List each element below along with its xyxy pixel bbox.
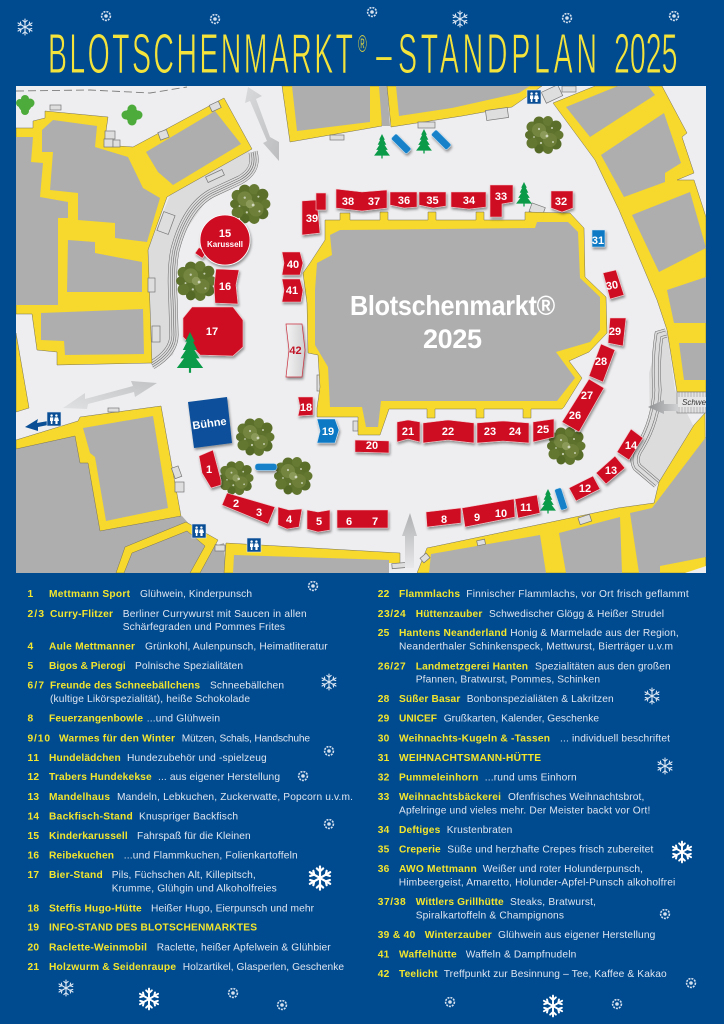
- stall 17: [183, 307, 243, 356]
- street name strip: [677, 392, 708, 413]
- arrows: [25, 87, 678, 568]
- stall 40: [282, 252, 303, 275]
- entry 15: [28, 831, 251, 842]
- title: BLOTSCHENMARKT: [48, 21, 353, 86]
- stalls 23 and 24: 23: [484, 426, 496, 438]
- entry 14: 14: [28, 812, 39, 823]
- entry 37/38: [378, 897, 596, 921]
- stall 8: 8: [441, 514, 447, 526]
- stage: Bühne: [192, 416, 227, 432]
- stall 11: 11: [520, 502, 532, 514]
- stall 20: 20: [366, 440, 378, 452]
- entry 32: ...rund ums Einhorn: [485, 772, 577, 783]
- stalls 37 and 38: [336, 189, 387, 211]
- stall 13: 13: [605, 465, 617, 477]
- entry 15: 15: [28, 831, 39, 842]
- stalls 2 and 3: 3: [256, 507, 262, 519]
- entry 32: [378, 772, 577, 783]
- entry 4: 4: [28, 641, 34, 652]
- entry 42: 42: [378, 969, 390, 980]
- stalls 9 and 10: [462, 499, 515, 527]
- entry 41: Waffelhütte: [399, 950, 457, 961]
- entry 8: [28, 714, 220, 725]
- title: ®: [358, 32, 367, 58]
- stall 31 info: [592, 230, 605, 247]
- stalls: [183, 185, 643, 532]
- entry 1: Mettmann Sport: [49, 589, 131, 600]
- stall 5: 5: [316, 516, 322, 528]
- entry 26/27: Landmetzgerei Hanten: [416, 661, 528, 672]
- entry 20: Raclette-Weinmobil: [49, 942, 147, 953]
- title: –: [376, 21, 392, 86]
- entry 26/27: [378, 661, 671, 685]
- entry 6/7: (kultige Likörspezialität), heiße Schokolade: [50, 694, 250, 705]
- stall 17: 17: [206, 326, 218, 338]
- buildings: bottom left block: [16, 406, 400, 573]
- stall 40: 40: [287, 259, 299, 271]
- entry 9/10: 9/10: [28, 733, 50, 744]
- entry 39 & 40: Glühwein aus eigener Herstellung: [498, 930, 656, 941]
- entry 14: Knuspriger Backfisch: [139, 812, 238, 823]
- entry 12: ... aus eigener Herstellung: [158, 772, 280, 783]
- stall 18: 18: [300, 402, 312, 414]
- entry 2/3: Berliner Currywurst mit Saucen in allen: [123, 609, 307, 620]
- entry 20: Raclette, heißer Apfelwein & Glühbier: [157, 942, 331, 953]
- entry 33: [378, 792, 650, 817]
- entry 18: 18: [28, 903, 39, 914]
- entry 39 & 40: 39 & 40: [378, 930, 416, 941]
- entry 21: Holzwurm & Seidenraupe: [49, 962, 176, 973]
- entry 28: Bonbonspezialiäten & Lakritzen: [467, 694, 614, 705]
- stall 28: [589, 344, 615, 382]
- entry 29: Grußkarten, Kalender, Geschenke: [444, 714, 599, 725]
- stall 39: [302, 193, 326, 235]
- entry 25: [378, 628, 679, 652]
- stall 34: [451, 192, 486, 209]
- stall 28: 28: [595, 356, 607, 368]
- entry 21: [28, 962, 344, 973]
- stall 11: [515, 495, 540, 518]
- stall 13: [596, 456, 625, 484]
- entry 25: Hantens Neanderland: [399, 628, 507, 639]
- entry 6/7: 6/7: [28, 681, 44, 692]
- entry 2/3: Schärfegraden und Pommes Frites: [123, 622, 285, 633]
- left road with steps: [148, 150, 257, 368]
- stall 36: 36: [398, 195, 410, 207]
- entry 25: Honig & Marmelade aus der Region,: [510, 628, 679, 639]
- entry 39 & 40: Winterzauber: [425, 930, 492, 941]
- entry 5: 5: [28, 661, 34, 672]
- entry 37/38: 37/38: [378, 897, 406, 908]
- entry 4: [28, 641, 328, 652]
- central building label: 2025: [423, 324, 482, 354]
- entry 2/3: Curry-Flitzer: [50, 609, 113, 620]
- entry 23/24: [378, 609, 664, 620]
- stalls 23 and 24: [477, 421, 529, 443]
- street name strip: Schwel: [682, 398, 708, 407]
- entry 23/24: Schwedischer Glögg & Heißer Strudel: [489, 609, 664, 620]
- entry 22: Flammlachs: [399, 589, 460, 600]
- entry 31: 31: [378, 753, 390, 764]
- stalls 26 and 27: 26: [569, 410, 581, 422]
- entry 41: 41: [378, 950, 390, 961]
- entry 11: [28, 753, 267, 764]
- entry 25: 25: [378, 628, 390, 639]
- entry 19: INFO-STAND DES BLOTSCHENMARKTES: [49, 923, 257, 934]
- entry 36: Himbeergeist, Amaretto, Holunder-Apfel-Punsch alkoholfrei: [399, 878, 675, 889]
- buildings: right block: [553, 86, 706, 392]
- stalls 2 and 3: 2: [233, 498, 239, 510]
- stall 14: [617, 429, 643, 460]
- entry 9/10: Warmes für den Winter: [59, 733, 175, 744]
- entry 30: Weihnachts-Kugeln & -Tassen: [399, 733, 550, 744]
- entry 18: Heißer Hugo, Eierpunsch und mehr: [151, 903, 315, 914]
- stall 32: 32: [555, 196, 567, 208]
- stall 14: 14: [625, 440, 638, 452]
- entry 32: 32: [378, 772, 390, 783]
- stall 32: [551, 191, 573, 212]
- entry 20: 20: [28, 942, 39, 953]
- entry 42: Teelicht: [399, 969, 438, 980]
- entry 4: Aule Mettmanner: [49, 641, 135, 652]
- stalls 6 and 7: 7: [372, 516, 378, 528]
- stall 18: [298, 397, 313, 416]
- stall 34: 34: [463, 195, 476, 207]
- entry 5: [28, 661, 243, 672]
- stall 1: 1: [206, 464, 212, 476]
- entry 11: Hundezubehör und -spielzeug: [127, 753, 267, 764]
- entry 31: WEIHNACHTSMANN-HÜTTE: [399, 751, 541, 764]
- entry 26/27: 26/27: [378, 661, 406, 672]
- entry 14: [28, 812, 238, 823]
- stalls 9 and 10: 10: [495, 508, 507, 520]
- entry 36: Weißer und roter Holunderpunsch,: [483, 864, 643, 875]
- entry 30: [378, 733, 670, 744]
- entry 8: Feuerzangenbowle: [49, 714, 143, 725]
- entry 26/27: Spezialitäten aus den großen: [535, 661, 671, 672]
- stalls 37 and 38: 38: [342, 196, 354, 208]
- stall 41: 41: [286, 285, 298, 297]
- entry 22: 22: [378, 589, 390, 600]
- entry 6/7: Schneebällchen: [210, 681, 284, 692]
- large christmas tree: [177, 332, 203, 373]
- entry 19: 19: [28, 923, 39, 934]
- entry 29: 29: [378, 714, 390, 725]
- entry 11: 11: [28, 753, 39, 764]
- entry 15: Fahrspaß für die Kleinen: [137, 831, 251, 842]
- stall 29: 29: [609, 326, 621, 338]
- entry 2/3: 2/3: [28, 609, 44, 620]
- map: [16, 85, 708, 573]
- stall 19 info: [317, 419, 339, 443]
- entry 18: Steffis Hugo-Hütte: [49, 903, 142, 914]
- entry 8: 8: [28, 714, 34, 725]
- stall 15 carousel: Karussell: [207, 240, 243, 249]
- stalls 26 and 27: [562, 379, 604, 432]
- entry 16: Reibekuchen: [49, 851, 114, 862]
- entry 9/10: Mützen, Schals, Handschuhe: [182, 733, 310, 744]
- entry 5: Polnische Spezialitäten: [135, 661, 243, 672]
- entry 33: 33: [378, 792, 390, 803]
- entry 17: [28, 870, 277, 895]
- entry 34: Krustenbraten: [447, 825, 512, 836]
- stalls 9 and 10: 9: [474, 512, 480, 524]
- entry 33: Ofenfrisches Weihnachtsbrot,: [508, 792, 644, 803]
- entry 16: [28, 851, 298, 862]
- stall 4: [278, 507, 302, 529]
- entry 16: ...und Flammkuchen, Folienkartoffeln: [124, 851, 298, 862]
- entry 28: 28: [378, 694, 390, 705]
- entry 13: Mandelhaus: [49, 792, 110, 803]
- entry 34: 34: [378, 825, 390, 836]
- entry 17: Pils, Füchschen Alt, Killepitsch,: [112, 870, 256, 881]
- entry 17: Bier-Stand: [49, 870, 103, 881]
- entry 36: 36: [378, 864, 390, 875]
- stall 30: 30: [605, 279, 619, 293]
- entry 25: Neanderthaler Schinkenspeck, Mettwurst, Bierträger u.v.m: [399, 641, 673, 652]
- entry 1: 1: [28, 589, 34, 600]
- stall 22: [423, 420, 474, 443]
- entry 30: 30: [378, 733, 390, 744]
- entry 9/10: [28, 733, 310, 744]
- entry 39 & 40: [378, 930, 656, 941]
- stall 36: [390, 192, 417, 208]
- entry 13: Mandeln, Lebkuchen, Zuckerwatte, Popcorn u.v.m.: [117, 792, 353, 803]
- stall 4: 4: [286, 514, 293, 526]
- blue benches: [255, 129, 568, 511]
- entry 42: Treffpunkt zur Besinnung – Tee, Kaffee & Kakao: [444, 969, 667, 980]
- central building label: [352, 295, 555, 348]
- stall 12: 12: [579, 483, 591, 495]
- entry 35: 35: [378, 844, 390, 855]
- entry 36: [378, 864, 675, 889]
- stalls 23 and 24: 24: [509, 426, 522, 438]
- stall 8: [426, 508, 461, 527]
- stalls 2 and 3: [222, 493, 275, 524]
- entry 34: Deftiges: [399, 825, 441, 836]
- trees: [16, 95, 586, 513]
- entry 16: 16: [28, 851, 39, 862]
- entry 33: Weihnachtsbäckerei: [399, 792, 501, 803]
- stall 41: [282, 279, 303, 302]
- entry 1: [28, 589, 252, 600]
- stall 25: [533, 419, 554, 442]
- entry 23/24: 23/24: [378, 609, 406, 620]
- entry 37/38: Steaks, Bratwurst,: [510, 897, 596, 908]
- stall 15 carousel: [195, 215, 250, 265]
- buildings: top centre block: [282, 86, 542, 142]
- entry 30: ... individuell beschriftet: [560, 733, 670, 744]
- stalls 6 and 7: [337, 510, 388, 528]
- title: [48, 21, 678, 86]
- stall 21: 21: [402, 426, 414, 438]
- entry 15: Kinderkarussell: [49, 831, 128, 842]
- buildings: bottom right block: [389, 413, 706, 573]
- legend left column: [28, 589, 353, 973]
- stall 21: [397, 420, 420, 442]
- entry 28: [378, 694, 614, 705]
- stage: [188, 397, 232, 448]
- entry 35: Creperie: [399, 844, 441, 855]
- stall 22: 22: [442, 426, 454, 438]
- entry 36: AWO Mettmann: [399, 864, 477, 875]
- central building: [303, 212, 607, 435]
- benches and small details: [50, 85, 592, 569]
- entry 12: Trabers Hundekekse: [49, 772, 152, 783]
- entry 37/38: Wittlers Grillhütte: [416, 897, 504, 908]
- stall 42: 42: [289, 345, 302, 357]
- stall 30: [603, 270, 624, 299]
- stall 19 info: 19: [322, 426, 334, 438]
- right road with steps: [632, 331, 694, 484]
- entry 13: 13: [28, 792, 39, 803]
- title: STANDPLAN: [398, 21, 597, 86]
- entry 18: [28, 903, 315, 914]
- stall 39: 39: [306, 213, 318, 225]
- stall 16: 16: [219, 281, 231, 293]
- stall 16: [214, 269, 239, 304]
- entry 2/3: [28, 609, 307, 633]
- entry 20: [28, 942, 331, 953]
- stall 31 info: 31: [592, 235, 604, 247]
- entry 32: Pummeleinhorn: [399, 772, 478, 783]
- entry 17: Krumme, Glühgin und Alkoholfreies: [112, 884, 277, 895]
- stall 12: [569, 476, 600, 501]
- entry 28: Süßer Basar: [399, 694, 460, 705]
- central building label: Blotschenmarkt®: [350, 290, 556, 321]
- entry 21: 21: [28, 962, 39, 973]
- entry 12: [28, 772, 280, 783]
- entry 6/7: [28, 681, 284, 705]
- entry 11: Hundelädchen: [49, 753, 121, 764]
- entry 14: Backfisch-Stand: [49, 812, 133, 823]
- stall 33: [490, 185, 513, 217]
- entry 41: [378, 950, 576, 961]
- entry 1: Glühwein, Kinderpunsch: [140, 589, 252, 600]
- entry 17: 17: [28, 870, 39, 881]
- stall 29: [608, 318, 626, 346]
- buildings: left block: [16, 98, 252, 412]
- stall 5: [307, 510, 330, 532]
- stalls 26 and 27: 27: [581, 390, 593, 402]
- stall 25: 25: [537, 424, 549, 436]
- entry 23/24: Hüttenzauber: [416, 609, 482, 620]
- stalls 37 and 38: 37: [368, 196, 380, 208]
- entry 37/38: Spiralkartoffeln & Champignons: [416, 910, 564, 921]
- stall 33: 33: [495, 191, 507, 203]
- restroom icons: [47, 90, 541, 552]
- stall 20: [355, 440, 389, 453]
- entry 29: UNICEF: [399, 714, 437, 725]
- entry 34: [378, 825, 512, 836]
- stalls 6 and 7: 6: [346, 516, 352, 528]
- stall 35: 35: [426, 195, 439, 207]
- entry 8: ...und Glühwein: [147, 714, 220, 725]
- entry 22: Finnischer Flammlachs, vor Ort frisch geflammt: [466, 589, 689, 600]
- entry 12: 12: [28, 772, 39, 783]
- entry 26/27: Pfannen, Bratwurst, Pommes, Schinken: [416, 674, 600, 685]
- entry 4: Grünkohl, Aulenpunsch, Heimatliteratur: [145, 641, 328, 652]
- entry 21: Holzartikel, Glasperlen, Geschenke: [183, 962, 344, 973]
- entry 6/7: Freunde des Schneebällchens: [50, 681, 200, 692]
- entry 5: Bigos & Pierogi: [49, 661, 126, 672]
- legend right column: [378, 589, 689, 980]
- stall 35: [419, 192, 446, 208]
- title: 2025: [614, 21, 678, 86]
- stall 42: [286, 324, 305, 377]
- entry 35: Süße und herzhafte Crepes frisch zubereitet: [447, 844, 653, 855]
- entry 41: Waffeln & Dampfnudeln: [466, 950, 576, 961]
- stall 1: [199, 450, 221, 488]
- entry 33: Apfelringe und vieles mehr. Der Meister backt vor Ort!: [399, 806, 650, 817]
- stall 15 carousel: 15: [219, 228, 231, 240]
